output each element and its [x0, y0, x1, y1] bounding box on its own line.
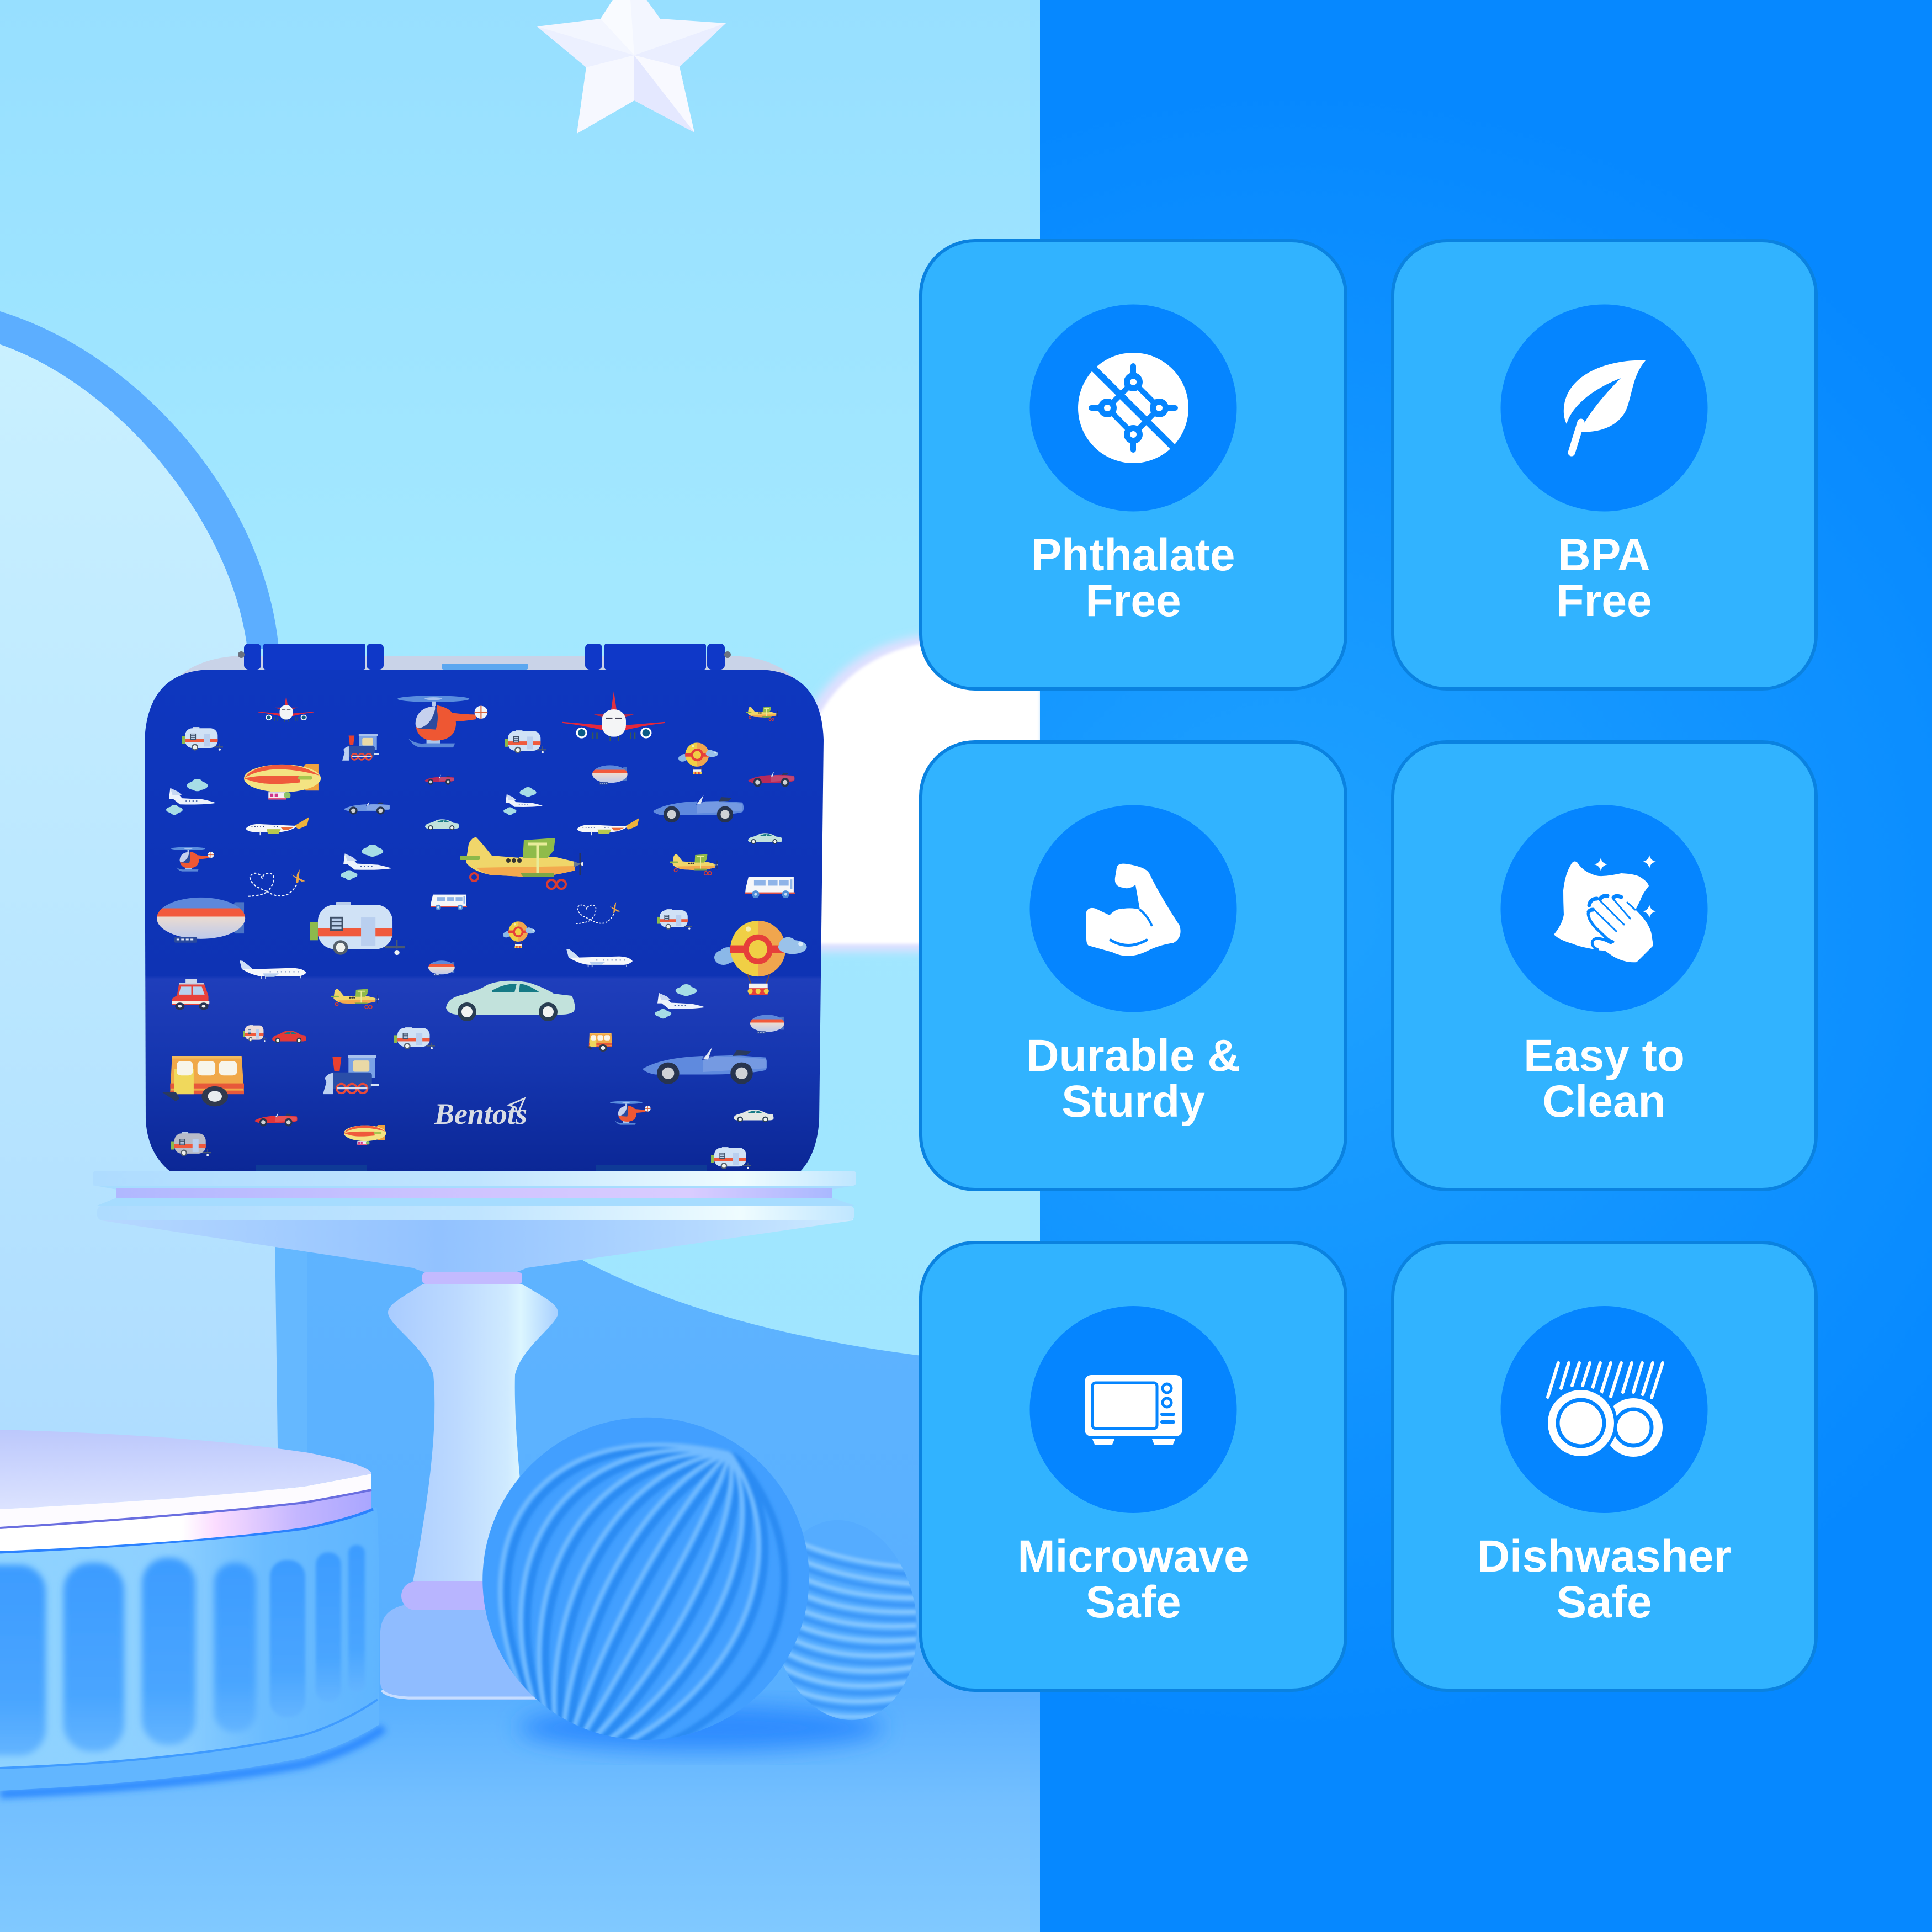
scene: floor: [0, 1696, 1040, 1932]
label: Dishwasher Safe: Dishwasher: [1477, 1531, 1731, 1581]
stickers: airliners: [240, 817, 639, 979]
label: Easy to Clean: Easy to: [1524, 1031, 1685, 1081]
label: Microwave Safe: Microwave: [1017, 1531, 1249, 1581]
stickers: caravans: [171, 727, 751, 1169]
stickers: blimps: [157, 764, 784, 1145]
pedestal cone: [102, 1219, 853, 1273]
stickers: jets with clouds: [166, 779, 705, 1018]
background: sky wall: [0, 0, 1040, 1932]
pedestal: [93, 1171, 856, 1700]
lunch box bottom clasps: [256, 1165, 707, 1171]
pedestal lower ring: [401, 1581, 534, 1610]
icon: microwave: [1085, 1375, 1182, 1445]
pedestal top disc: [93, 1171, 856, 1186]
stickers: cars: [272, 819, 782, 1122]
label: BPA Free: Free: [1556, 576, 1652, 626]
label: Phthalate Free: Phthalate: [1031, 530, 1235, 580]
stickers: hot air balloons: [503, 742, 807, 995]
pedestal groove fillets: [93, 1185, 856, 1206]
lunch box body: [145, 670, 824, 1171]
right blue panel: [1040, 0, 1932, 1932]
drum bottom edge line: [0, 1700, 378, 1768]
label: Dishwasher Safe: Safe: [1556, 1577, 1652, 1627]
stickers: roadsters: [254, 771, 795, 1127]
drum band: [0, 1489, 371, 1551]
pedestal groove: [116, 1188, 832, 1198]
decoration: white cloud arch: [773, 629, 1040, 952]
scene: strip beside wall: [274, 1187, 307, 1490]
label: Durable & Sturdy: Sturdy: [1061, 1076, 1205, 1127]
icon: dishwasher plates: [1544, 1363, 1663, 1459]
scene: blue back wall and hill: [274, 1187, 1040, 1711]
label: BPA Free: BPA: [1558, 530, 1650, 580]
drum plate rim: [0, 1474, 371, 1527]
small ribbed sphere: [783, 1541, 917, 1720]
label: Easy to Clean: Clean: [1542, 1076, 1666, 1127]
pedestal stem: [388, 1284, 558, 1581]
lunch box: [145, 644, 824, 1171]
pedestal lower disc: [97, 1206, 854, 1220]
drum podium: [0, 1430, 384, 1794]
lunch box grey back lid: [157, 656, 817, 740]
drum band shadow: [0, 1509, 373, 1552]
drum body: [0, 1507, 379, 1768]
pedestal base rim: [382, 1690, 552, 1698]
stickers: buses: [431, 877, 795, 910]
card: Dishwasher Safe: [1393, 1243, 1816, 1690]
shadow: spheres on floor: [519, 1705, 883, 1751]
card: BPA Free: [1393, 241, 1816, 689]
pedestal base: [380, 1604, 552, 1700]
drum base lip: [0, 1678, 379, 1791]
stickers: biplanes: [331, 707, 779, 1009]
lunch box hinges: [244, 644, 725, 670]
stickers: trains: [323, 734, 379, 1094]
scene: arch ring: [0, 311, 279, 649]
stickers: helicopters: [171, 696, 651, 1125]
label: Microwave Safe: Safe: [1085, 1577, 1181, 1627]
icon: leaf: [1564, 360, 1646, 453]
drum floor shadow: [0, 1728, 384, 1794]
card: Microwave Safe: [921, 1243, 1346, 1690]
lunch box latch: [442, 664, 528, 670]
drum flutes: [0, 1545, 365, 1755]
icon: hand wiping with cloth: [1554, 855, 1656, 962]
stickers: heart flight paths: [248, 869, 620, 923]
card: Durable & Sturdy: [921, 742, 1346, 1190]
card: Easy to Clean: [1393, 742, 1816, 1190]
card: Phthalate Free: [921, 241, 1346, 689]
label: Phthalate Free: Free: [1085, 576, 1181, 626]
lunch box screws: [238, 651, 731, 658]
pedestal neck ring: [422, 1272, 522, 1284]
scene: light inner wall: [0, 344, 278, 1656]
drum top plate surface: [0, 1430, 371, 1509]
big ribbed sphere: [482, 1418, 809, 1740]
decoration: star: [537, 0, 726, 134]
label: Durable & Sturdy: Durable &: [1026, 1031, 1240, 1081]
stickers: planes front: [258, 691, 665, 741]
drum plate shadow line: [0, 1490, 371, 1528]
logo: Bentots: Bentots: [434, 1097, 527, 1130]
icon: flexed arm: [1086, 864, 1181, 956]
stickers: suv and trailers: [162, 979, 612, 1106]
icon: no phthalate molecule: [1078, 353, 1188, 463]
